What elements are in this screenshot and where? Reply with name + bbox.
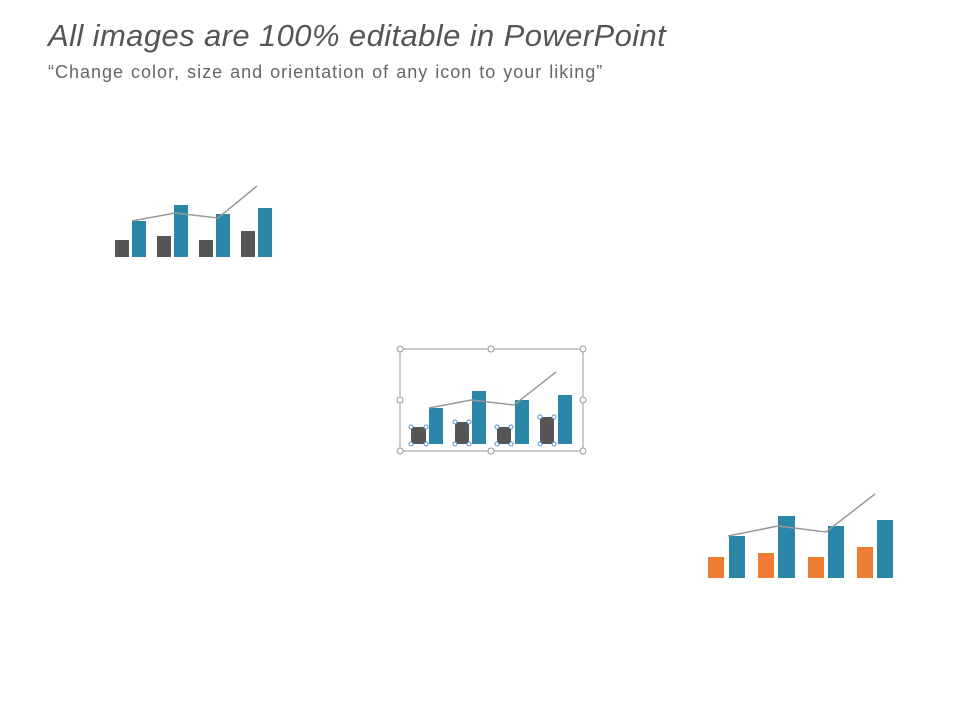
title: All images are 100% editable in PowerPoint — [48, 18, 666, 53]
subtitle: “Change color, size and orientation of any icon to your liking” — [48, 62, 603, 82]
chart: bottom-right orange/blue — [708, 494, 893, 578]
chart: middle selected — [397, 346, 586, 454]
chart: top-left dark/blue — [115, 186, 272, 257]
